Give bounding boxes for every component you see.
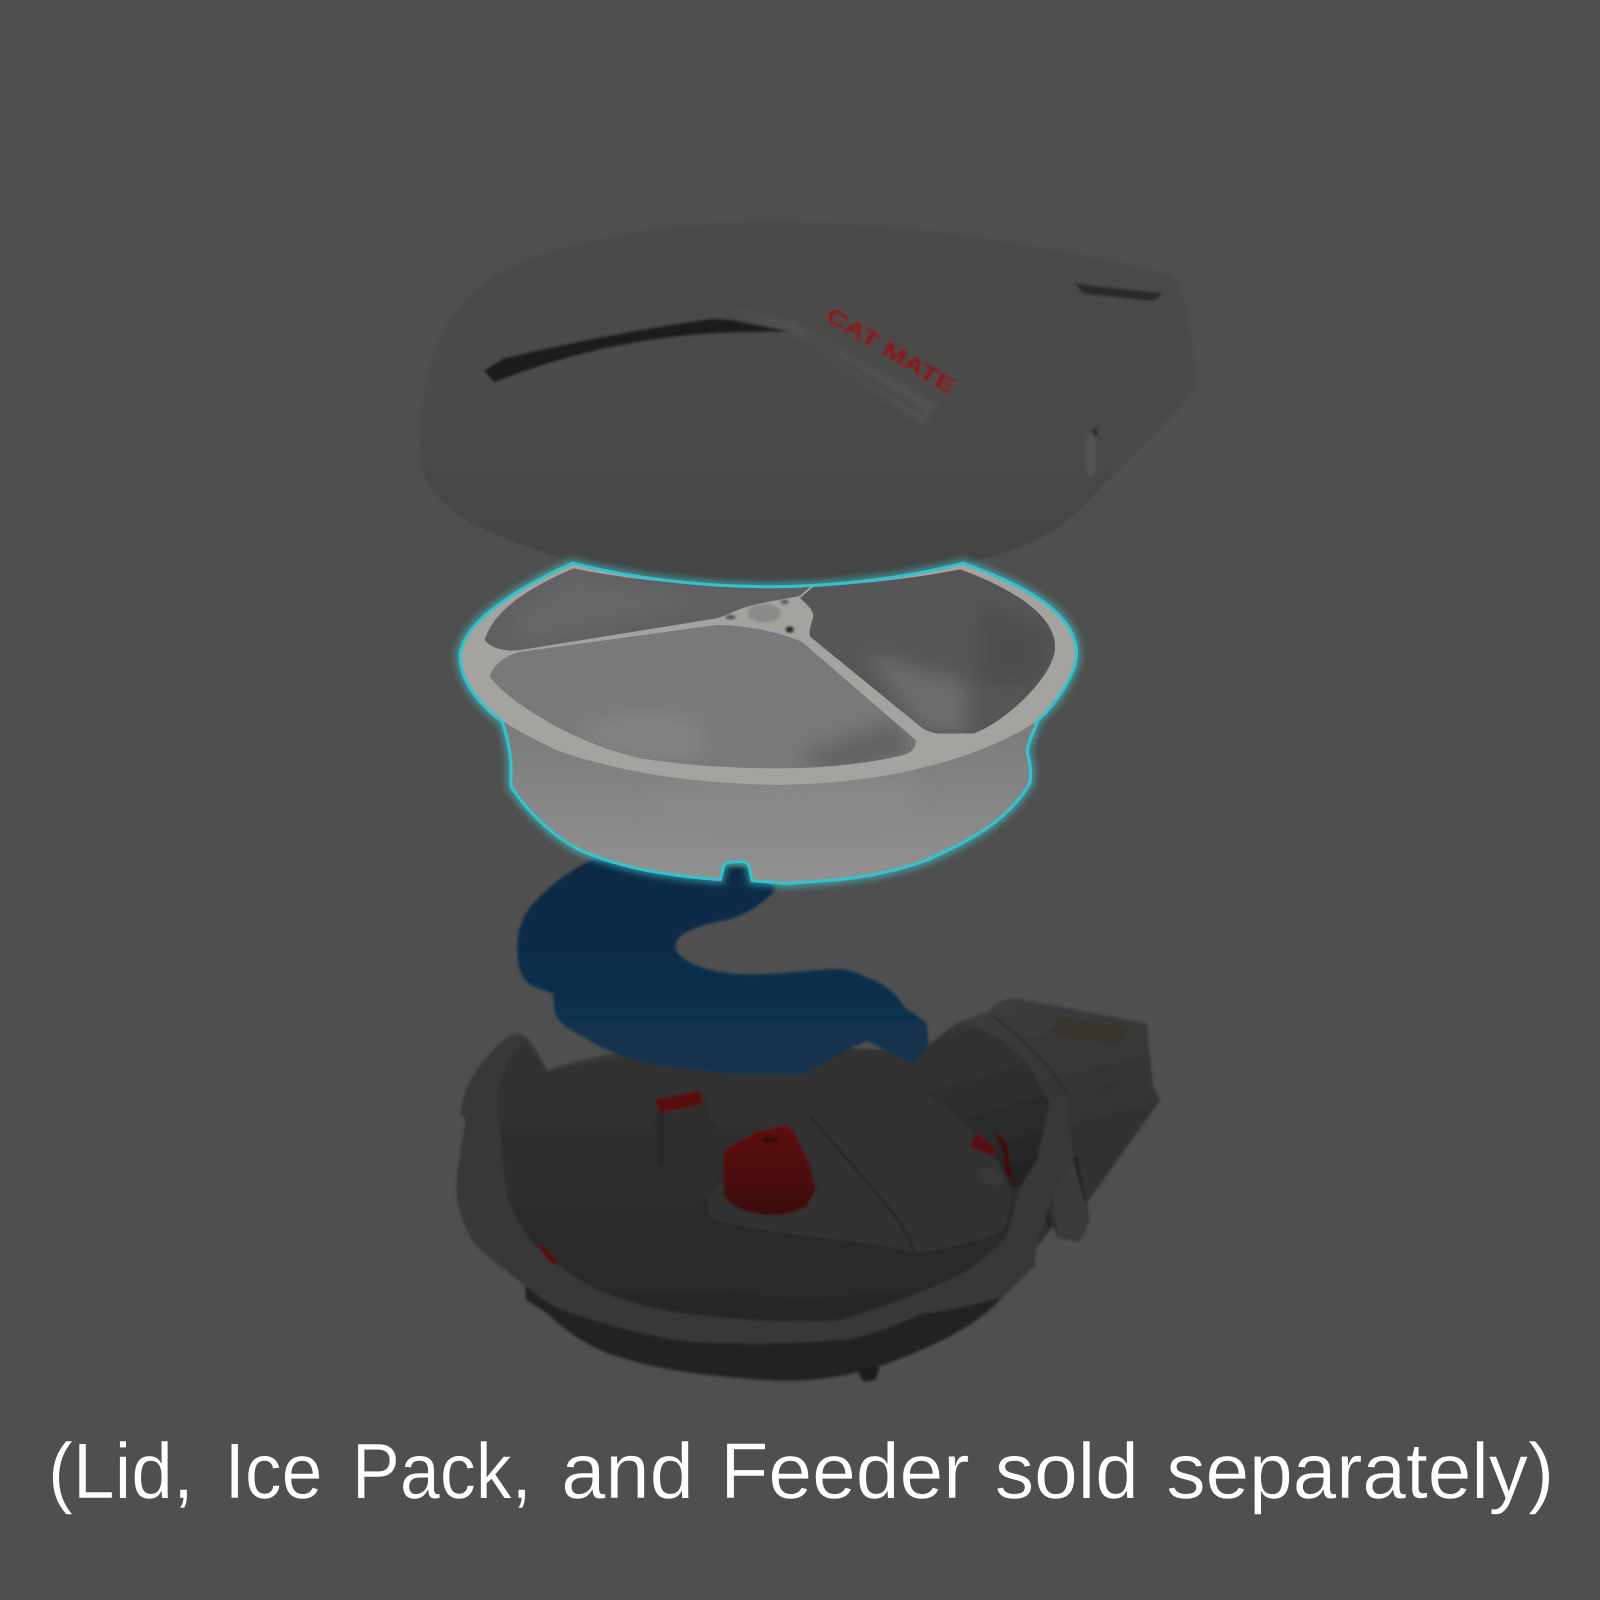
wall front panel: [653, 781, 918, 839]
ice pack: [517, 860, 929, 1074]
centre handle ridge: [727, 310, 936, 424]
handle shadow: [806, 337, 923, 413]
cyan outline: [460, 563, 1077, 884]
feeder base: [456, 998, 1160, 1382]
left red sliver: [537, 1245, 560, 1265]
control housing: [956, 998, 1160, 1247]
cyan outer glow: [460, 563, 1077, 884]
lid: [420, 221, 1198, 590]
caption: sold: [995, 1427, 1139, 1515]
clip slits: [1043, 1157, 1084, 1227]
post dark edge: [658, 1112, 664, 1165]
right red clip: [971, 1133, 997, 1156]
lid silhouette: [420, 221, 1198, 590]
caption: [48, 1427, 1554, 1515]
right compartment base: [800, 570, 1055, 734]
housing seam: [993, 1016, 1066, 1093]
right compartment: [800, 570, 1055, 734]
right compartment lighter floor: [876, 657, 971, 734]
left post: [655, 1100, 714, 1163]
brand text: CAT MATE: [822, 303, 959, 399]
front compartment: [490, 625, 916, 768]
bowl wall: [460, 563, 1077, 884]
caption: Feeder: [720, 1427, 969, 1515]
red centre spindle: [723, 1124, 816, 1215]
tray outer rim: [456, 1034, 1050, 1344]
clip tab: [1053, 1161, 1090, 1242]
ice pack body: [517, 860, 929, 1074]
central hump top: [708, 1097, 1011, 1253]
front compartment floor light: [602, 722, 692, 751]
red clip: [655, 1091, 704, 1113]
housing display screen: [1050, 1016, 1130, 1045]
right compartment dark corner: [988, 619, 1044, 682]
side button: [1086, 433, 1096, 478]
central hump side: [694, 1179, 1003, 1298]
hub hole: [748, 604, 781, 622]
left slot: [484, 318, 792, 383]
hump seam: [810, 1116, 913, 1250]
back compartment base: [484, 568, 810, 650]
housing buttons: [1094, 1065, 1116, 1090]
caption: separately): [1166, 1427, 1554, 1515]
bowl rim: [461, 564, 1076, 785]
right red sliver: [993, 1130, 1013, 1184]
feeder feet: [855, 1367, 880, 1382]
button shadow: [1091, 427, 1098, 437]
spindle top hole: [762, 1136, 779, 1144]
right rim strip: [1007, 1094, 1073, 1269]
caption: (Lid,: [48, 1427, 194, 1515]
back compartment shade: [540, 594, 617, 623]
control housing inner wall: [915, 1023, 1050, 1187]
food bowl with cyan highlight: [460, 561, 1077, 884]
front compartment base: [485, 617, 923, 770]
hub screw holes: [726, 615, 736, 619]
front compartment dark corner: [806, 720, 912, 768]
tray floor: [497, 1023, 1050, 1321]
small peg: [973, 1163, 1006, 1190]
feeder underside: [524, 1276, 1010, 1381]
caption: and: [561, 1427, 694, 1515]
caption: Pack,: [352, 1427, 532, 1515]
back compartment: [484, 568, 810, 650]
caption: Ice: [224, 1427, 322, 1515]
right slot: [1074, 284, 1161, 301]
exploded product illustration: [52, 282, 1550, 1514]
